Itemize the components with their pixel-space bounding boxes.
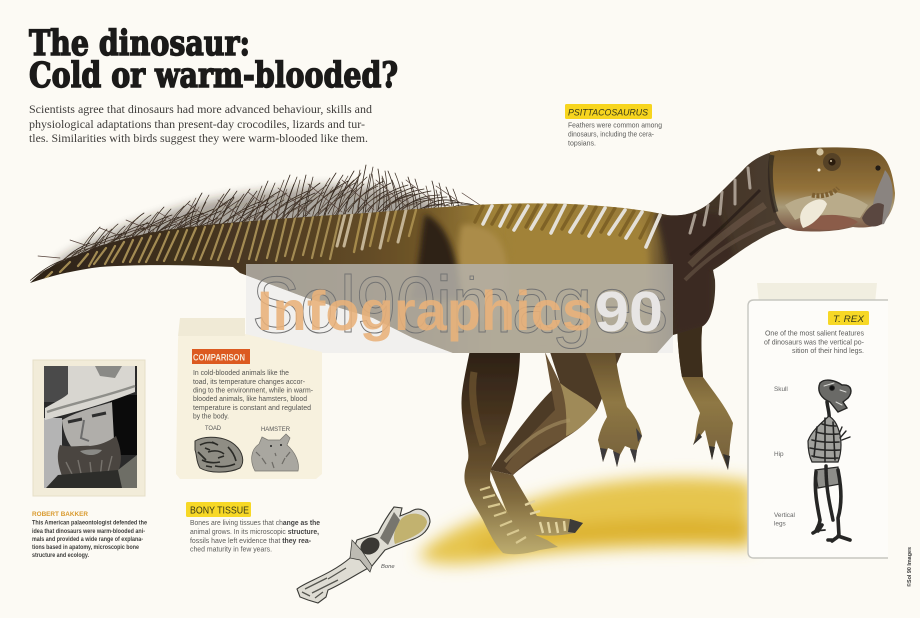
bone caption: Bone (381, 564, 395, 570)
credit: ©Sol 90 Images (906, 547, 913, 587)
near foreleg (585, 352, 642, 467)
skeleton labels: legs (774, 520, 786, 528)
bakker caption: mals and provided a wide range of explana- (32, 537, 143, 543)
comparison text (193, 368, 313, 420)
note text: topsians. (568, 138, 596, 148)
label (828, 311, 869, 325)
intro text: tles. Similarities with birds suggest they were warm-blooded like them. (29, 133, 368, 145)
heading (192, 349, 250, 364)
watermark: Sol90images (252, 260, 668, 349)
intro text: physiological adaptations than present-day crocodiles, lizards and tur- (29, 119, 365, 131)
label: T. REX (833, 313, 865, 324)
eye (823, 153, 841, 171)
psittacosaurus note (565, 104, 662, 148)
note text: dinosaurs, including the cera- (568, 130, 654, 138)
skeleton labels (774, 386, 795, 528)
near hind leg (461, 350, 558, 554)
note text (190, 518, 320, 554)
card text: sition of their hind legs. (792, 346, 864, 355)
note text: fossils have left evidence that they rea- (190, 536, 311, 545)
card text: of dinosaurs was the vertical po- (764, 338, 864, 346)
tape (757, 283, 877, 303)
toad (195, 425, 243, 472)
title (29, 23, 398, 96)
label: BONY TISSUE (190, 506, 249, 516)
comparison text: temperature is constant and regulated (193, 403, 311, 412)
tail feathers (26, 165, 481, 293)
comparison text: blooded animals, like hamsters, blood (193, 394, 307, 403)
cheek horn (800, 199, 827, 228)
card text (764, 328, 864, 355)
bone illustration (297, 507, 430, 603)
note text: Bones are living tissues that change as the (190, 518, 320, 527)
comparison text: ding to the environment, while in warm- (193, 386, 313, 394)
note text: animal grows. In its microscopic structure, (190, 527, 319, 536)
comparison card (176, 318, 322, 479)
t. rex card (748, 283, 888, 558)
t. rex skeleton (808, 380, 851, 541)
far foreleg (677, 320, 733, 470)
hip and flank shading (44, 168, 775, 340)
bony tissue note (186, 502, 320, 554)
body and neck (30, 150, 800, 353)
watermark: 90 (595, 280, 663, 344)
title: The dinosaur: (29, 23, 250, 64)
bakker caption: structure and ecology. (32, 553, 89, 559)
comparison text: In cold-blooded animals like the (193, 368, 289, 377)
heading: COMPARISON (193, 352, 245, 362)
bakker caption: idea that dinosaurs were warm-blooded ani- (32, 529, 145, 535)
portrait (44, 366, 137, 488)
skeleton labels: Vertical (774, 512, 795, 519)
watermark: Infographics (257, 279, 593, 342)
hamster: HAMSTER (261, 426, 290, 433)
far hind leg (490, 352, 622, 536)
card text: One of the most salient features (765, 328, 864, 338)
bakker caption: This American palaeontologist defended the (32, 520, 148, 526)
note text (568, 120, 662, 148)
comparison text: by the body. (193, 412, 229, 420)
skeleton labels: Skull (774, 386, 788, 393)
photo card: Robert Bakker (33, 360, 145, 496)
back stripes (44, 168, 750, 280)
title: Cold or warm-blooded? (29, 55, 398, 96)
skeleton labels: Hip (774, 451, 784, 458)
hamster (252, 426, 298, 471)
bakker caption: ROBERT BAKKER (32, 511, 88, 518)
toad: TOAD (205, 425, 221, 432)
intro text (29, 104, 372, 145)
intro text: Scientists agree that dinosaurs had more advanced behaviour, skills and (29, 104, 372, 116)
bakker caption: tions based in apatomy, microscopic bone (32, 545, 140, 551)
illustration: psittacosaurus (26, 147, 895, 554)
comparison text: toad, its temperature changes accor- (193, 377, 305, 386)
note text: ched maturity in few years. (190, 544, 272, 554)
note text: Feathers were common among (568, 120, 662, 130)
label: PSITTACOSAURUS (568, 108, 649, 118)
bakker caption (32, 511, 148, 559)
nostril (875, 165, 881, 171)
head (769, 147, 895, 232)
ground shadow: yellow wash (418, 477, 752, 564)
